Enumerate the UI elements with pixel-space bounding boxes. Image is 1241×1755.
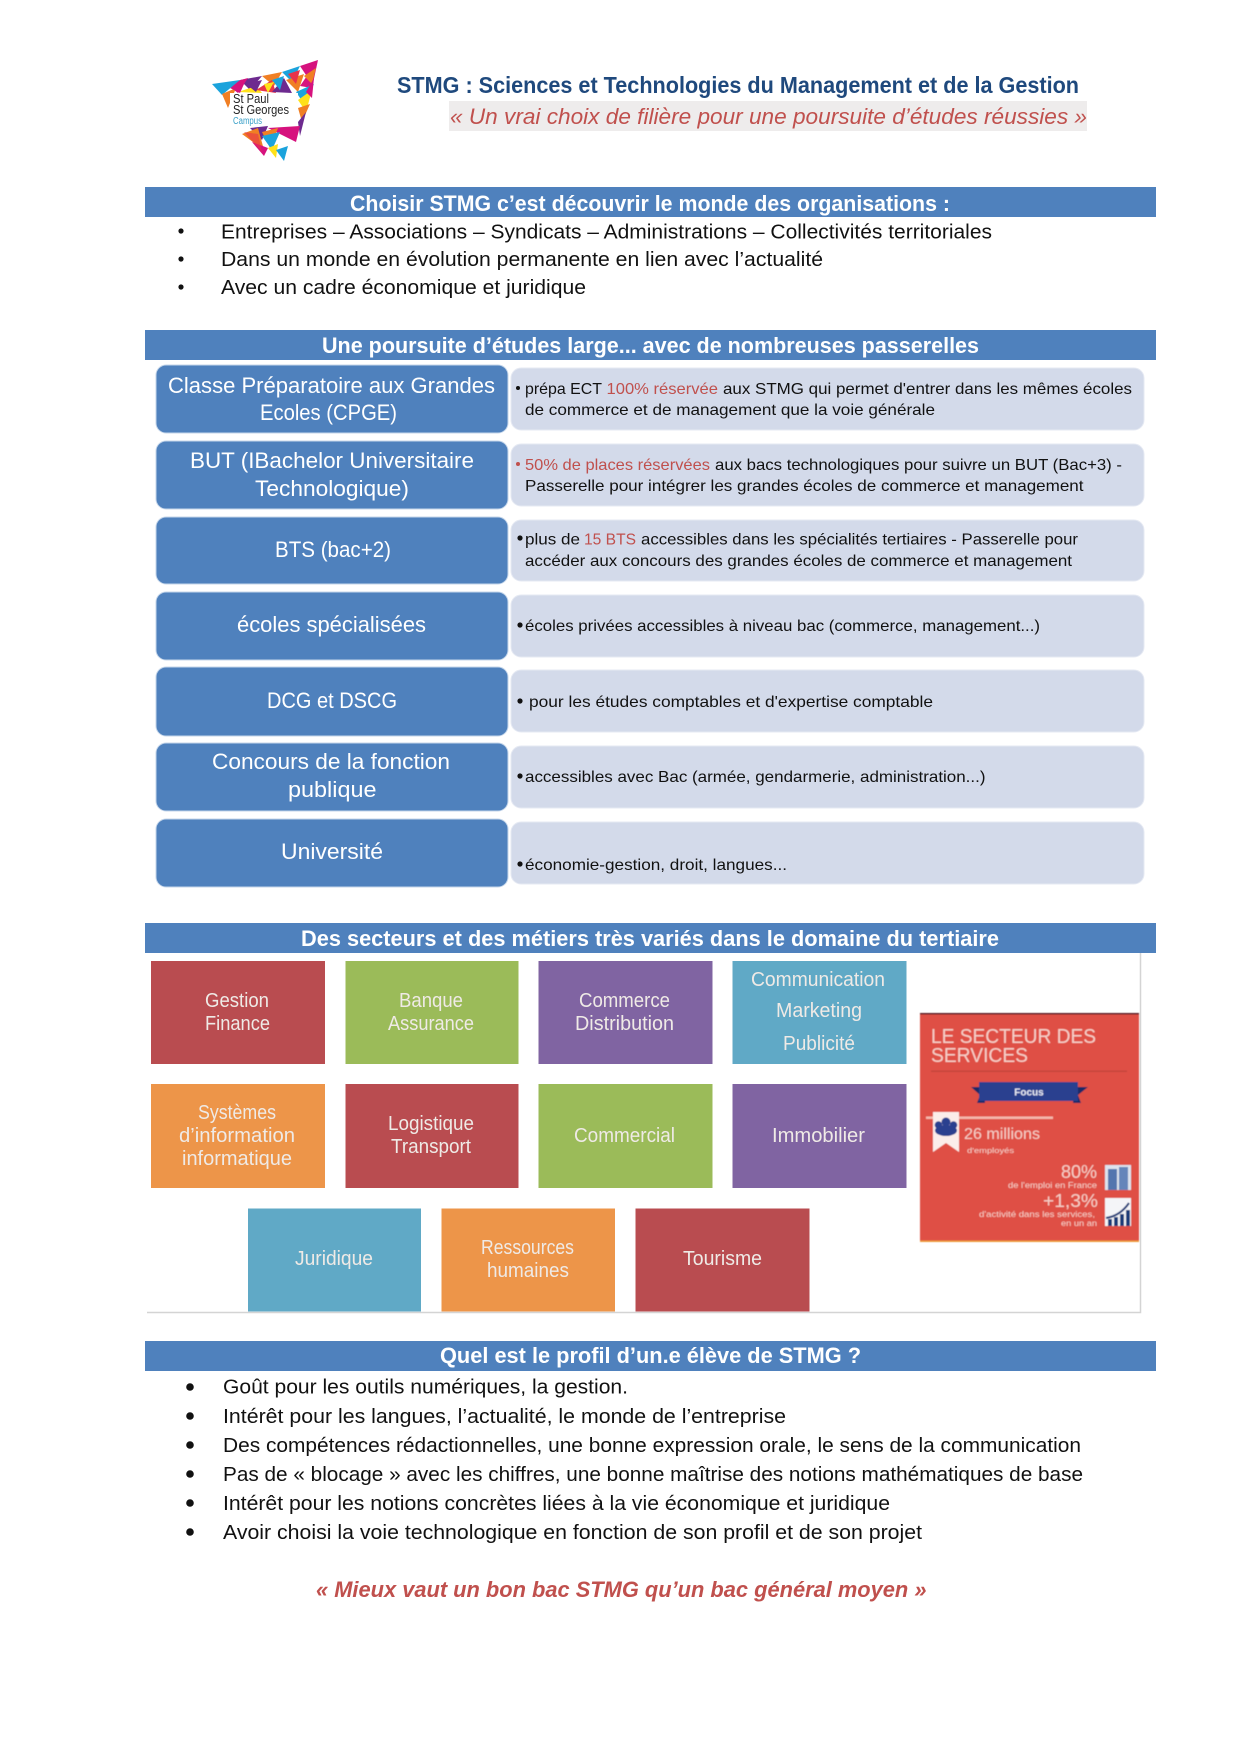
row: fonction publique: Concours de la fonction bbox=[212, 749, 450, 774]
heading: Des secteurs et des métiers très variés dans le domaine du tertiaire bbox=[301, 926, 999, 951]
heading bbox=[145, 923, 1156, 953]
panel: le secteur des services: de l'emploi en France bbox=[1008, 1181, 1098, 1190]
panel: le secteur des services: d'employés bbox=[967, 1146, 1014, 1155]
row: fonction publique: accessibles avec Bac (armée, gendarmerie, administration...) bbox=[525, 769, 986, 786]
row: DCG et DSCG bbox=[156, 667, 1144, 736]
bullet list: Avoir choisi la voie technologique en fonction de son profil et de son projet bbox=[223, 1522, 922, 1544]
tile: Communication Marketing Publicité: Communication bbox=[751, 969, 885, 991]
heading bbox=[145, 330, 1156, 360]
row: BUT: Technologique) bbox=[255, 476, 409, 501]
heading bbox=[145, 1341, 1156, 1371]
section: profil de l'élève bbox=[145, 1341, 1156, 1544]
tile: Gestion Finance: Finance bbox=[205, 1013, 270, 1035]
panel: le secteur des services: +1,3% bbox=[1043, 1191, 1098, 1211]
bullet list: Entreprises – Associations – Syndicats – Administrations – Collectivités territoriales bbox=[221, 222, 992, 244]
section: poursuite d'études bbox=[145, 330, 1156, 887]
tile: Commerce Distribution bbox=[538, 961, 712, 1064]
tile: Commercial bbox=[538, 1084, 712, 1188]
tile: Banque Assurance bbox=[346, 961, 518, 1064]
panel: le secteur des services: LE SECTEUR DES bbox=[931, 1026, 1096, 1048]
row: écoles spécialisées bbox=[156, 592, 1144, 660]
bullet list: Intérêt pour les langues, l’actualité, le monde de l’entreprise bbox=[223, 1406, 786, 1428]
heading: Choisir STMG c’est découvrir le monde des organisations : bbox=[350, 191, 950, 216]
tile: Systèmes d'information: Systèmes bbox=[198, 1102, 276, 1124]
tile: Communication Marketing Publicité bbox=[732, 961, 906, 1064]
subtitle: « Un vrai choix de filière pour une poursuite d’études réussies » bbox=[450, 104, 1087, 129]
icon: people bookmark bbox=[933, 1112, 959, 1152]
panel: le secteur des services: 26 millions bbox=[964, 1126, 1040, 1143]
panel: le secteur des services: SERVICES bbox=[931, 1045, 1028, 1067]
tile: Systèmes d'information: d’information bbox=[179, 1125, 295, 1147]
tile: Banque Assurance: Assurance bbox=[388, 1013, 474, 1035]
panel: le secteur des services bbox=[920, 1013, 1139, 1242]
heading: Une poursuite d’études large... avec de nombreuses passerelles bbox=[322, 333, 979, 358]
tile: Banque Assurance: Banque bbox=[399, 990, 463, 1012]
bullet list: Intérêt pour les notions concrètes liées à la vie économique et juridique bbox=[223, 1493, 890, 1515]
tile: Commerce Distribution: Distribution bbox=[575, 1013, 674, 1035]
row: CPGE bbox=[156, 365, 1144, 433]
bullet list bbox=[186, 1376, 1083, 1544]
frame lines bbox=[147, 953, 1140, 1312]
logo: St Paul St Georges Campus: St Georges bbox=[233, 102, 289, 117]
row: CPGE: Ecoles (CPGE) bbox=[260, 400, 397, 425]
row: BUT: BUT (IBachelor Universitaire bbox=[190, 448, 474, 473]
tile: Immobilier bbox=[732, 1084, 906, 1188]
heading: Quel est le profil d’un.e élève de STMG ? bbox=[440, 1343, 861, 1368]
tile: Commerce Distribution: Commerce bbox=[579, 990, 670, 1012]
bullet list: Goût pour les outils numériques, la gestion. bbox=[223, 1376, 628, 1398]
bullet list: Avec un cadre économique et juridique bbox=[221, 277, 586, 299]
row: BTS bbox=[156, 517, 1144, 584]
row: université: économie-gestion, droit, langues... bbox=[525, 857, 787, 874]
section: secteurs et métiers bbox=[145, 923, 1156, 1312]
row: DCG et DSCG: pour les études comptables et d'expertise comptable bbox=[529, 694, 933, 711]
row: BTS: BTS (bac+2) bbox=[275, 537, 391, 562]
tile: Immobilier: Immobilier bbox=[772, 1125, 865, 1147]
logo: St Paul St Georges Campus: St Paul bbox=[233, 91, 269, 106]
tile: Systèmes d'information bbox=[151, 1084, 325, 1188]
bullet list: Dans un monde en évolution permanente en lien avec l’actualité bbox=[221, 249, 823, 271]
tile: Ressources humaines: Ressources bbox=[481, 1237, 574, 1259]
row: écoles spécialisées: écoles privées accessibles à niveau bac (commerce, management...) bbox=[525, 618, 1040, 635]
panel: le secteur des services: en un an bbox=[1061, 1219, 1097, 1228]
tile: Gestion Finance bbox=[151, 961, 325, 1064]
section: organisations bbox=[145, 187, 1156, 299]
tile: Ressources humaines bbox=[442, 1208, 615, 1312]
logo: St Paul St Georges Campus bbox=[212, 60, 318, 161]
row: BTS: accéder aux concours des grandes écoles de commerce et management bbox=[525, 553, 1073, 570]
bullet list: Des compétences rédactionnelles, une bonne expression orale, le sens de la communication bbox=[223, 1435, 1081, 1457]
tile: Communication Marketing Publicité: Publicité bbox=[783, 1033, 855, 1055]
row: CPGE: aux STMG qui permet d'entrer dans les mêmes écoles bbox=[723, 381, 1132, 398]
closing quote: « Mieux vaut un bon bac STMG qu’un bac général moyen » bbox=[316, 1577, 926, 1602]
tile: Logistique Transport bbox=[346, 1084, 518, 1188]
row: fonction publique bbox=[156, 743, 1144, 811]
bullet list: Pas de « blocage » avec les chiffres, une bonne maîtrise des notions mathématiques de base bbox=[223, 1464, 1083, 1486]
tile: Tourisme bbox=[636, 1208, 810, 1312]
row: BUT bbox=[156, 441, 1144, 509]
heading bbox=[145, 187, 1156, 217]
row: BUT: Passerelle pour intégrer les grandes écoles de commerce et management bbox=[525, 478, 1084, 495]
row: BTS: 15 BTS bbox=[584, 532, 636, 548]
row: écoles spécialisées: écoles spécialisées bbox=[237, 612, 426, 637]
tile: Logistique Transport: Transport bbox=[391, 1136, 471, 1158]
row: fonction publique: publique bbox=[288, 777, 376, 802]
row: BUT: aux bacs technologiques pour suivre un BUT (Bac+3) - bbox=[715, 457, 1122, 474]
title: STMG : Sciences et Technologies du Management et de la Gestion bbox=[397, 72, 1079, 98]
tile: Tourisme: Tourisme bbox=[683, 1248, 762, 1270]
row: BTS: accessibles dans les spécialités tertiaires - Passerelle pour bbox=[641, 532, 1079, 548]
tile: Logistique Transport: Logistique bbox=[388, 1113, 474, 1135]
row: BUT: 50% de places réservées bbox=[525, 457, 710, 474]
row: université: Université bbox=[281, 839, 383, 864]
row: CPGE: de commerce et de management que la voie générale bbox=[525, 402, 935, 419]
row: BTS: plus de bbox=[525, 532, 580, 548]
row: CPGE: prépa ECT bbox=[525, 381, 602, 398]
logo: St Paul St Georges Campus: Campus bbox=[233, 116, 262, 127]
panel: le secteur des services: d'activité dans les services, bbox=[979, 1210, 1095, 1219]
tile: Communication Marketing Publicité: Marketing bbox=[776, 1000, 862, 1022]
row: DCG et DSCG: DCG et DSCG bbox=[267, 688, 397, 713]
icon: buildings bbox=[1105, 1165, 1131, 1190]
tile: Gestion Finance: Gestion bbox=[205, 990, 269, 1012]
bullet list bbox=[178, 222, 992, 299]
icon: focus ribbon bbox=[971, 1082, 1088, 1103]
row: CPGE: Classe Préparatoire aux Grandes bbox=[168, 373, 495, 398]
icon: growth chart bbox=[1105, 1198, 1131, 1226]
tile: Systèmes d'information: informatique bbox=[182, 1148, 292, 1170]
row: CPGE: 100% réservée bbox=[606, 381, 718, 398]
tile: Commercial: Commercial bbox=[574, 1125, 675, 1147]
tile: Juridique bbox=[248, 1208, 421, 1312]
panel: le secteur des services: 80% bbox=[1061, 1162, 1097, 1182]
tile: Ressources humaines: humaines bbox=[487, 1260, 569, 1282]
row: université bbox=[156, 819, 1144, 887]
icon: focus ribbon: Focus bbox=[1014, 1088, 1044, 1098]
tile: Juridique: Juridique bbox=[295, 1248, 373, 1270]
